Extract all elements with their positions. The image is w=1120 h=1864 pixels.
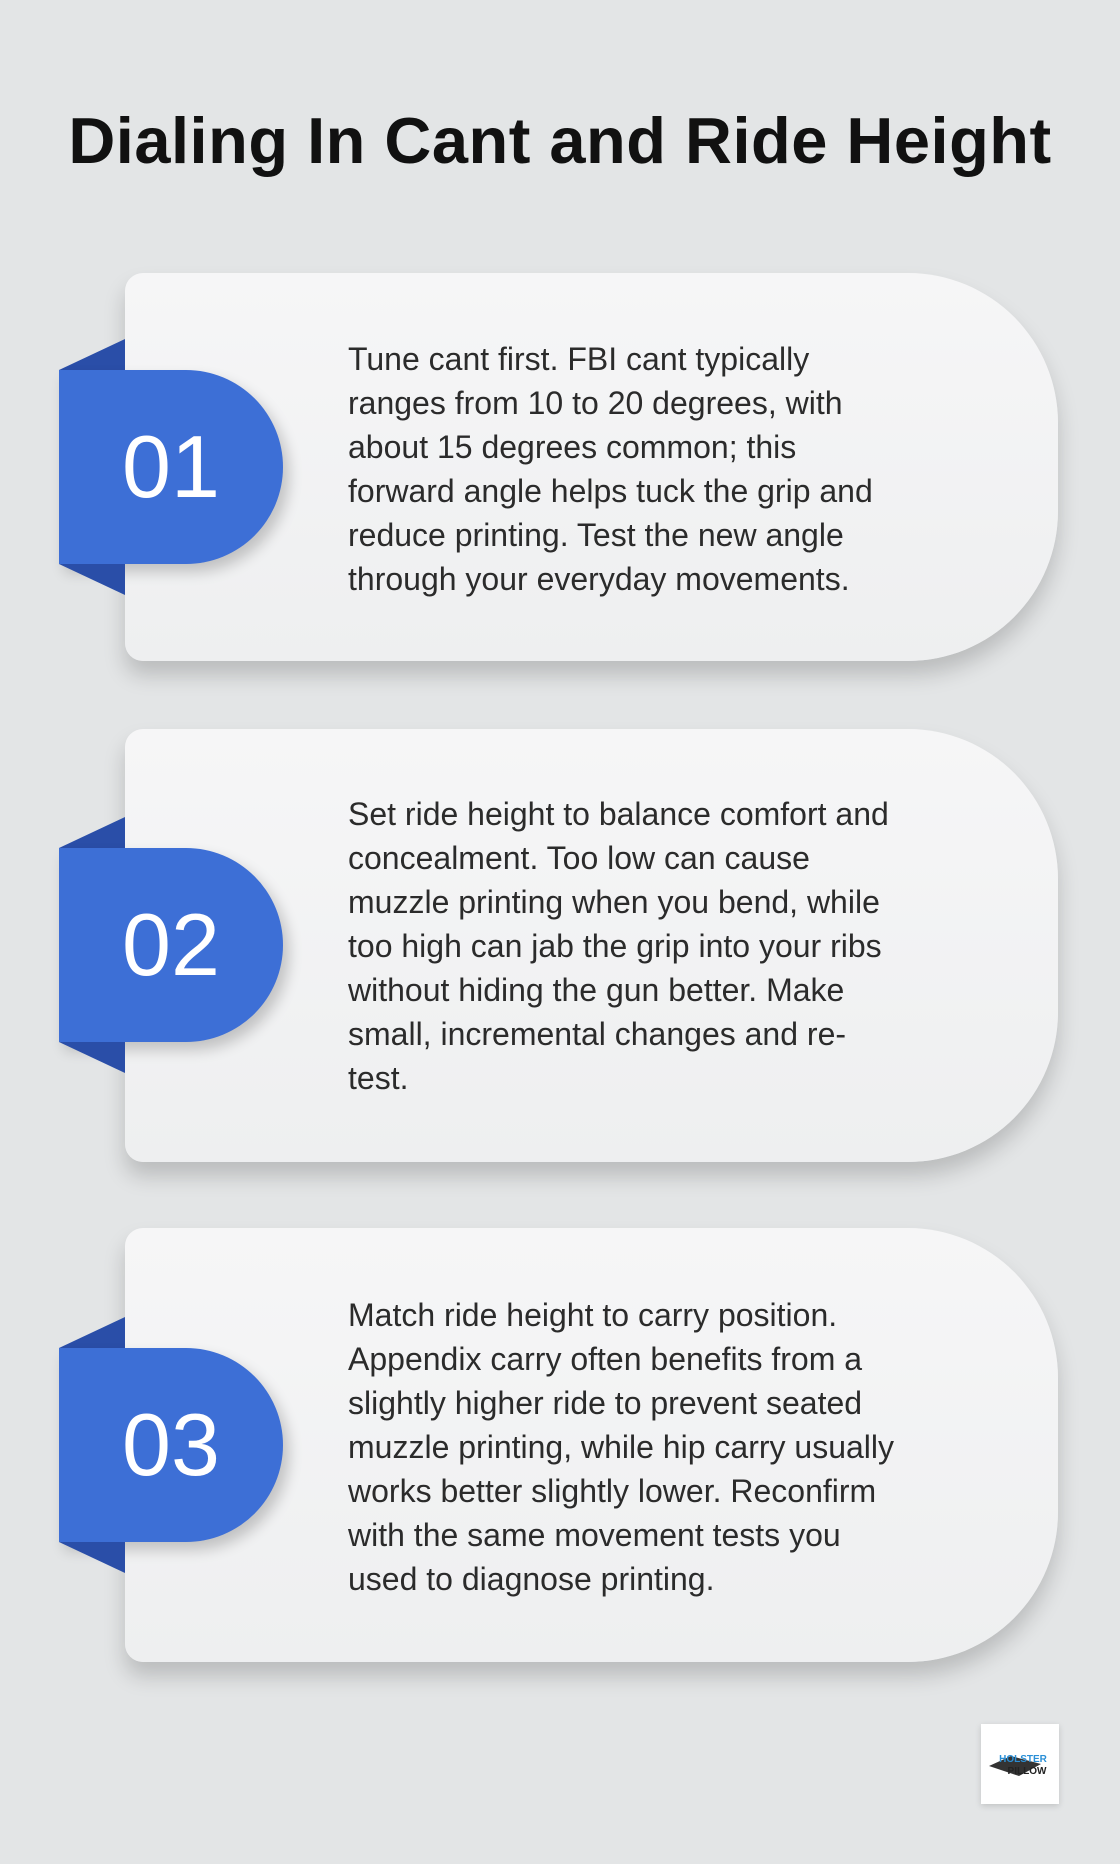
logo: PILLOW	[1008, 1766, 1047, 1777]
text: step 2: too high can jab the grip into your ribs	[348, 928, 882, 964]
text: step 2: muzzle printing when you bend, while	[348, 884, 880, 920]
logo: HOLSTER	[999, 1754, 1048, 1765]
badge: 03	[58, 1317, 295, 1573]
text: step 1: ranges from 10 to 20 degrees, with	[348, 385, 842, 421]
panel: step 2	[125, 729, 1058, 1162]
text: step 1: through your everyday movements.	[348, 561, 850, 597]
text: step 2: without hiding the gun better. Make	[348, 972, 844, 1008]
text: step 1: forward angle helps tuck the grip and	[348, 473, 873, 509]
badge: 02	[58, 817, 295, 1073]
text: step 1: reduce printing. Test the new angle	[348, 517, 844, 553]
text: step 2: concealment. Too low can cause	[348, 840, 810, 876]
title: Dialing In Cant and Ride Height	[68, 104, 1052, 177]
panel: step 1	[125, 273, 1058, 661]
text: step 3: Match ride height to carry position.	[348, 1297, 837, 1333]
text: step 1: Tune cant first. FBI cant typically	[348, 341, 809, 377]
text: step 3: Appendix carry often benefits from a	[348, 1341, 862, 1377]
badge: 02: 02	[122, 895, 220, 994]
text: step 3	[348, 1297, 894, 1597]
badge: 03: 03	[122, 1395, 220, 1494]
text: step 2	[348, 796, 889, 1096]
text: step 3: works better slightly lower. Reconfirm	[348, 1473, 876, 1509]
text: step 1: about 15 degrees common; this	[348, 429, 796, 465]
panel: step 3	[125, 1228, 1058, 1662]
logo	[981, 1724, 1059, 1804]
text: step 2: small, incremental changes and re-	[348, 1016, 846, 1052]
badge: 01: 01	[122, 417, 220, 516]
text: step 2: Set ride height to balance comfort and	[348, 796, 889, 832]
text: step 1	[348, 341, 873, 597]
badge: 01	[58, 339, 295, 595]
text: step 2: test.	[348, 1060, 408, 1096]
text: step 3: slightly higher ride to prevent seated	[348, 1385, 862, 1421]
text: step 3: used to diagnose printing.	[348, 1561, 714, 1597]
text: step 3: with the same movement tests you	[348, 1517, 841, 1553]
text: step 3: muzzle printing, while hip carry usually	[348, 1429, 894, 1465]
